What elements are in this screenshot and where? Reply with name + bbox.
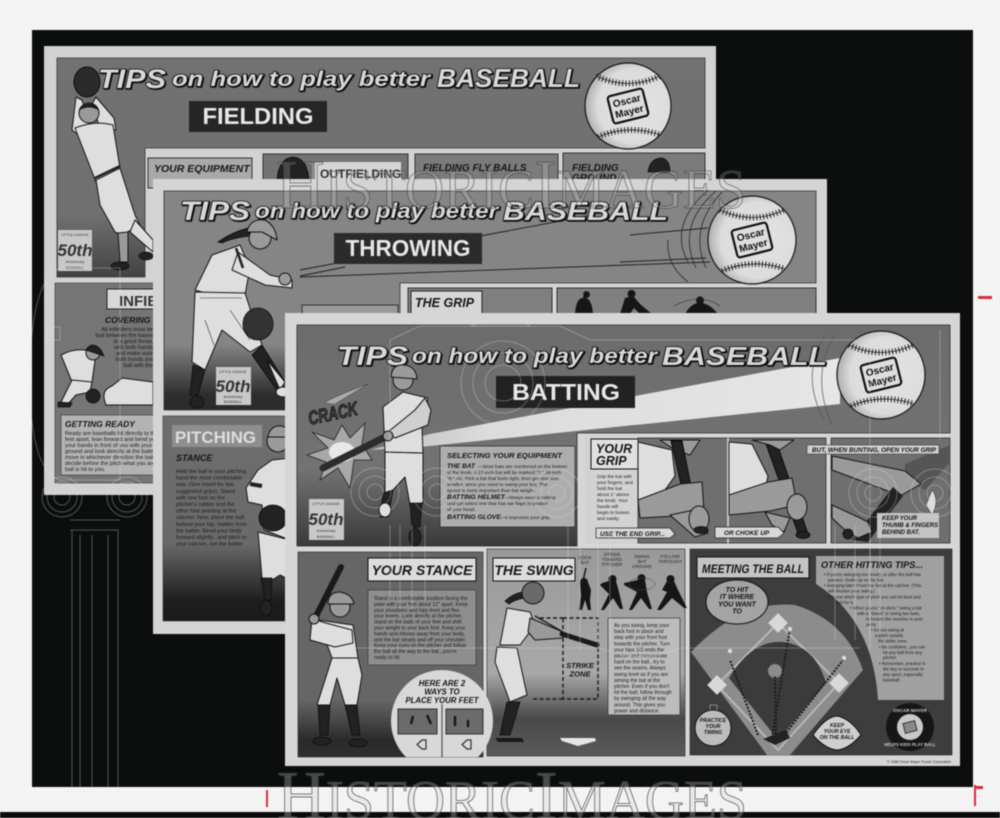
watermark: historic images top: HISTORICIMAGES xyxy=(276,147,746,224)
badge: oscar mayer helps kids play ball: HELPS KIDS PLAY BALL xyxy=(884,742,936,747)
text: crack: CRACK xyxy=(306,399,361,430)
text: pitching stance: catcher. Now, place the ball xyxy=(176,515,244,521)
text: swing: hit the ball, follow through xyxy=(614,690,672,696)
drawing: end grip xyxy=(638,440,709,537)
text: swing xyxy=(608,618,680,715)
title: batting sheet: on how to play better xyxy=(412,345,659,368)
text: swing: pitcher and concentrate xyxy=(614,654,667,660)
strike zone: ZONE xyxy=(568,670,591,678)
panel: outfielding xyxy=(258,149,411,184)
text: other hitting tips: the key to success in xyxy=(883,667,924,672)
text: pitching stance: hand the most comfortable xyxy=(176,476,242,482)
drawing: bunting hands xyxy=(832,445,950,542)
box: your equipment xyxy=(148,158,252,188)
heading: fielding: FIELDING xyxy=(202,103,314,129)
text: other hitting tips xyxy=(816,556,944,700)
text: pitching stance: behind your hip, hidden from xyxy=(176,522,247,528)
text: other hitting tips: baseball. xyxy=(883,677,901,682)
label: your stance xyxy=(368,558,476,581)
title: throwing sheet xyxy=(180,196,668,226)
text: other hitting tips: • Remember, practice is xyxy=(879,661,926,666)
text: getting ready: your hands in front of you with your glove xyxy=(65,443,167,449)
icon: keep your eye on the ball xyxy=(813,716,861,750)
callout: to hit it where you want to: TO HIT xyxy=(726,587,749,594)
icon: practice your timing stopwatch: TIMING xyxy=(704,730,722,736)
text: swing: step with your front foot xyxy=(614,635,668,641)
text: swing: your hips 1/3 ends the xyxy=(614,647,664,653)
text: other hitting tips: wait for it. xyxy=(835,600,854,605)
box: throwing equipment outline xyxy=(302,305,398,315)
text: getting ready: move in whichever direction the ball is xyxy=(65,455,159,461)
badge: 50th anniversary: BASEBALL xyxy=(224,400,242,404)
title: batting sheet: TIPS xyxy=(337,341,408,371)
heading: fielding xyxy=(189,101,327,132)
text: stance: your weight to your back foot. Keep your xyxy=(374,626,465,632)
icon: keep your eye on the ball: KEEP xyxy=(830,723,845,729)
text: swing: by swinging all the way xyxy=(614,696,667,702)
text: covering: is a good throw, xyxy=(114,339,153,345)
text: swing: around. This gives you xyxy=(614,702,665,708)
text: covering: both hands are xyxy=(116,357,153,363)
text: stance: Keep your eyes on the pitcher and follow xyxy=(374,643,466,649)
label: your grip: YOUR xyxy=(596,442,632,456)
callout: two ways to place your feet: WAYS TO xyxy=(424,688,460,696)
heading: batting: BATTING xyxy=(512,379,620,405)
text: stance: your shoulders and hips level and flex xyxy=(374,608,460,614)
heading: batting xyxy=(496,376,635,408)
icon: practice your timing stopwatch: PRACTICE xyxy=(700,718,727,724)
icon: home plate xyxy=(560,738,596,746)
text: pitching stance: suggested grips). Stand xyxy=(176,489,235,495)
text: other hitting tips: hit any ball from any xyxy=(883,650,923,655)
label: or choke up: OR CHOKE UP xyxy=(724,530,770,537)
diagram: baseball field xyxy=(691,605,863,755)
text: getting ready xyxy=(61,415,167,475)
callout: two ways to place your feet: HERE ARE 2 xyxy=(419,679,466,688)
swing stage labels: SWING xyxy=(634,554,650,559)
badge: 50th anniversary: Anniversary xyxy=(317,529,336,533)
swing stage labels: AROUND xyxy=(632,564,653,569)
text: copyright: © 1988 Oscar Mayer Foods Corporation xyxy=(887,760,951,764)
text: stance: your knees. Look directly at the pitcher, xyxy=(374,614,462,620)
panel: the grip: THE GRIP xyxy=(415,296,475,310)
label: use the end grip: USE THE END GRIP... xyxy=(600,531,665,538)
text: getting ready: ground and look directly at the batter. xyxy=(65,449,157,455)
speed rings xyxy=(812,335,835,425)
text: stance: stand on the balls of your feet and shift xyxy=(374,620,462,626)
text: other hitting tips: any sport, especially xyxy=(883,672,924,677)
badge: 50th anniversary xyxy=(58,230,92,271)
label: your stance: YOUR STANCE xyxy=(372,562,473,578)
text: other hitting tips: to loosen the muscles in your xyxy=(866,616,923,621)
text: pitching stance: other foot pointing at the xyxy=(176,509,236,515)
text: pitching stance: pitcher's rubber and the xyxy=(176,502,235,508)
label: meeting the ball xyxy=(697,557,809,578)
callout: to hit it where you want to: IT WHERE xyxy=(720,594,754,601)
label: but when bunting: BUT, WHEN BUNTING, OPEN YOUR GRIP xyxy=(812,448,937,454)
title: throwing sheet: BASEBALL xyxy=(503,196,668,226)
panel: fielding header xyxy=(57,58,705,277)
text: selecting your equipment xyxy=(440,446,575,527)
text: stance: ready to hit. xyxy=(374,655,401,661)
text: pitching stance: with one foot on the xyxy=(175,495,225,501)
icon: oscar mayer baseball: Oscar xyxy=(865,362,895,379)
swing stage labels xyxy=(578,552,682,569)
text: other hitting tips: a pitch outside xyxy=(875,633,904,638)
text: getting ready: GETTING READY xyxy=(65,419,136,429)
swing stage labels: PITCHER xyxy=(602,562,623,567)
text: getting ready: feet apart, lean forward and bend your xyxy=(65,437,160,443)
icon: oscar mayer baseball: Mayer xyxy=(614,103,645,121)
label: the swing: THE SWING xyxy=(494,562,574,578)
text: other hitting tips: • Swinging late? Front the bat at the catcher. (This xyxy=(824,583,922,588)
label: use the end grip xyxy=(596,528,675,538)
badge: 50th anniversary: BASEBALL xyxy=(66,266,84,270)
panel: your grip xyxy=(585,434,826,544)
swing stage labels: COCK xyxy=(578,555,593,560)
crop marks xyxy=(266,296,992,807)
callout: to hit it where you want to: TO xyxy=(732,609,742,616)
label: but when bunting xyxy=(807,445,939,454)
title: fielding sheet: TIPS xyxy=(98,64,166,94)
panel: outfielding: OUTFIELDING xyxy=(320,167,401,181)
text: swing: power and distance. xyxy=(614,708,660,714)
text: selecting your equipment: smaller, since you need to swing your bat. The xyxy=(447,482,548,488)
label: or choke up xyxy=(715,527,784,538)
text: other hitting tips: the strike zone. xyxy=(878,638,908,643)
text: swing: swing level as if you are xyxy=(614,672,668,678)
speed lines xyxy=(300,190,722,282)
text: swing: hard on the ball...try to xyxy=(614,660,665,666)
text: other hitting tips: passed, choke up on the bat. xyxy=(828,577,884,582)
icon: keep your eye on the ball: YOUR EYE xyxy=(824,729,851,735)
text: swing: aiming the bat at the xyxy=(614,678,660,684)
badge: 50th anniversary: 50th xyxy=(309,510,343,529)
text: other hitting tips: with a "donut" or swing two bats, xyxy=(857,611,920,616)
badge: 50th anniversary: LITTLE LEAGUE xyxy=(312,502,340,506)
text: getting ready: decide before the pitch what you are xyxy=(65,461,155,467)
text: swing: towards the pitcher. Turn xyxy=(614,641,670,647)
text: other hitting tips: will shorten your swing.) xyxy=(828,589,875,594)
text: selecting your equipment: "8," etc. Pick a bat that feels right, then get one size xyxy=(447,476,559,482)
drawing: choke up xyxy=(729,440,810,538)
panel: fielding fly balls xyxy=(415,154,558,184)
text: stance: plate with your feet about 12" apart. Keep xyxy=(374,602,468,608)
badge: 50th anniversary xyxy=(216,367,251,405)
label: pitching: PITCHING xyxy=(175,429,256,447)
text: other hitting tips: • Know which type of pitch you can hit best and xyxy=(829,594,921,599)
text: selecting your equipment: —Always wear a batting xyxy=(503,495,556,501)
figure: infielder and slider xyxy=(58,345,153,407)
text: pitching stance: way. (See insert for two xyxy=(175,482,234,488)
icon: oscar mayer baseball xyxy=(837,331,925,419)
icon: oscar mayer baseball: Oscar xyxy=(736,227,766,244)
callout: two ways to place your feet: PLACE YOUR FEET xyxy=(405,696,480,705)
figure: batter swinging xyxy=(495,582,597,742)
panel: grip photos xyxy=(638,438,826,543)
text: swing: pitcher. Even if you don't xyxy=(614,684,670,690)
sheet: throwing xyxy=(153,179,827,634)
badge: 50th anniversary: 50th xyxy=(58,241,92,260)
text: selecting your equipment: BATTING HELMET xyxy=(447,494,506,501)
text: selecting your equipment: —It improves your grip. xyxy=(500,515,551,521)
text: grip: your fingers, and xyxy=(597,480,633,486)
icon: oscar mayer baseball: Mayer xyxy=(867,372,898,390)
icon: oscar mayer baseball: Mayer xyxy=(738,237,769,255)
text: selecting your equipment: —Most bats are numbered on the bottom xyxy=(478,464,567,470)
text: covering: and make sure xyxy=(116,351,153,357)
text: other hitting tips: • Be confident...you can xyxy=(879,644,926,649)
text: swing: see the seams. Always xyxy=(614,666,666,672)
badge: oscar mayer helps kids play ball xyxy=(884,703,936,751)
panel: your stance xyxy=(298,552,483,757)
figure: fielder catching xyxy=(72,67,153,270)
text: grip: about 1" above xyxy=(597,492,629,498)
label: meeting the ball: MEETING THE BALL xyxy=(702,564,804,576)
icon: keep your eye on the ball: ON THE BALL xyxy=(820,735,854,741)
figure: thrower xyxy=(190,220,292,408)
sheet: fielding xyxy=(44,46,716,495)
badge: 50th anniversary: Anniversary xyxy=(66,260,85,264)
panel: fielding fly balls: FIELDING FLY BALLS xyxy=(423,163,527,174)
text: other hitting tips: • If you're swinging too slowly, or after the ball has xyxy=(824,572,922,577)
text: selecting your equipment: of the knob. A 27-inch bat will be marked "7," 28-inch xyxy=(447,470,561,476)
text: stance xyxy=(368,590,476,665)
text: getting ready: Ready are baseballs hit directly to the xyxy=(65,431,158,437)
text: selecting your equipment: and get select one that has ear flaps to protect xyxy=(447,501,548,507)
icon: oscar mayer baseball xyxy=(585,63,671,149)
icon: oscar mayer baseball: Oscar xyxy=(612,93,642,110)
sheet: batting xyxy=(285,313,960,772)
swing stage labels: STRIDE xyxy=(604,552,620,557)
label: your grip: GRIP xyxy=(596,454,627,468)
box: your equipment: YOUR EQUIPMENT xyxy=(154,163,251,175)
figure: pitcher xyxy=(245,424,286,603)
text: other hitting tips: • Do not swing at xyxy=(871,628,905,633)
swing stage labels: BAT xyxy=(638,559,646,564)
text: other hitting tips: pitcher. xyxy=(883,655,897,660)
label: keep your thumb xyxy=(877,513,939,538)
callout: to hit it where you want to xyxy=(706,580,768,624)
swing stage labels: BAT xyxy=(581,560,589,565)
text: grip: the knob. Your xyxy=(597,498,628,504)
text: grip: begin to loosen xyxy=(597,510,630,516)
text: covering: COVERING xyxy=(105,315,151,325)
text: grip: hold the bat xyxy=(597,486,623,492)
text: selecting your equipment: of your head. xyxy=(447,507,476,513)
icon: swing stage silhouettes xyxy=(579,568,687,610)
panel: throwing motion silhouettes xyxy=(557,288,816,314)
callout: to hit it where you want to: YOU WANT xyxy=(718,601,757,608)
swing stage labels: FOLLOW xyxy=(660,554,680,559)
badge: 50th anniversary: LITTLE LEAGUE xyxy=(219,370,247,374)
badge: 50th anniversary xyxy=(309,499,344,540)
label: the swing xyxy=(493,558,575,581)
text: pitching stance: Hold the ball in your pitching xyxy=(176,469,246,475)
text: stance: and the bat steady and off your shoulder. xyxy=(374,637,466,643)
title: fielding sheet: on how to play better xyxy=(172,68,432,91)
strike zone: STRIKE xyxy=(566,661,595,670)
badge: 50th anniversary: Anniversary xyxy=(224,395,243,399)
panel: infielding xyxy=(55,283,167,483)
panel: throwing header xyxy=(164,191,816,410)
panel: the swing xyxy=(487,549,687,756)
strike zone xyxy=(533,618,598,699)
panel: bunting grip xyxy=(807,438,950,543)
text: swing: back foot in place and xyxy=(614,629,664,635)
icon: oscar mayer baseball xyxy=(708,196,796,284)
icon: practice your timing stopwatch xyxy=(695,705,731,746)
text: covering: ball with the xyxy=(123,363,153,369)
figure: batter stance xyxy=(309,567,367,747)
title: throwing sheet: on how to play better xyxy=(255,200,500,223)
text: stance: hands and elbows away from your body, xyxy=(374,631,465,637)
swoosh arc xyxy=(325,384,368,404)
figure: batter follow through xyxy=(323,365,431,546)
label: keep your thumb: KEEP YOUR xyxy=(882,516,918,522)
text: grip: hands will xyxy=(597,504,618,510)
label: infielding xyxy=(107,289,157,310)
panel: pitching xyxy=(163,416,290,621)
panel: the grip xyxy=(403,284,552,314)
label: keep your thumb: THUMB & FINGERS xyxy=(882,523,938,529)
burst: bat hits ball xyxy=(307,423,372,488)
text: pitching stance: forward slightly...and pitch to xyxy=(176,535,246,541)
text: covering: fast between the bases xyxy=(95,333,153,339)
text: swing: As you swing, keep your xyxy=(614,623,670,629)
panel: fielding ground balls: GROUND xyxy=(572,173,616,184)
title: fielding sheet xyxy=(98,63,580,94)
heading: stance: STANCE xyxy=(176,453,213,463)
text: pitching stance: the batter. Bend your body xyxy=(176,528,242,534)
title: fielding sheet: BASEBALL xyxy=(437,63,580,93)
swing stage labels: TOWARD xyxy=(602,557,623,562)
text: selecting your equipment: SELECTING YOUR EQUIPMENT xyxy=(447,451,563,460)
text: other hitting tips: arms. xyxy=(866,622,877,627)
badge: oscar mayer helps kids play ball: OSCAR MAYER xyxy=(893,708,928,713)
title: batting sheet xyxy=(337,341,827,371)
text: covering: All infielders must be xyxy=(101,327,153,333)
text: selecting your equipment: speed is more important than bat weight. xyxy=(447,488,535,494)
label: infielding: INFIE xyxy=(119,293,157,310)
icon: practice your timing stopwatch: YOUR xyxy=(706,724,721,730)
beam of light xyxy=(370,358,840,450)
panel: batting header xyxy=(297,325,950,546)
text: selecting your equipment: BATTING GLOVE xyxy=(447,514,501,521)
panel: fielding ground balls: FIELDING xyxy=(572,163,619,174)
text: pitching stance: your catcher, not the batter. xyxy=(176,542,244,548)
badge: 50th anniversary: BASEBALL xyxy=(317,535,335,539)
label: your grip xyxy=(591,439,638,469)
text: covering xyxy=(95,315,153,369)
heading: throwing: THROWING xyxy=(346,235,470,261)
panel: fielding ground balls xyxy=(563,153,705,184)
title: throwing sheet: TIPS xyxy=(180,196,250,226)
text: other hitting tips: OTHER HITTING TIPS... xyxy=(821,560,923,571)
label: keep your thumb: BEHIND BAT. xyxy=(882,530,920,536)
text: grip: and easily. xyxy=(597,516,620,522)
text: other hitting tips: • When you're "on deck," swing a bat xyxy=(850,606,922,611)
text: getting ready: ball is hit to you. xyxy=(65,467,106,473)
swing stage labels: THROUGH xyxy=(658,559,682,564)
text: stance: Stand in a comfortable position facing the xyxy=(374,596,468,602)
callout: two ways to place your feet xyxy=(390,669,494,758)
badge: 50th anniversary: LITTLE LEAGUE xyxy=(61,233,89,237)
badge: 50th anniversary: 50th xyxy=(216,377,250,396)
text: grip: Grip the bat with xyxy=(597,474,632,480)
title: batting sheet: BASEBALL xyxy=(662,341,827,371)
watermark: camera and columns xyxy=(30,268,959,790)
panel: meeting the ball xyxy=(690,549,952,755)
text: selecting your equipment: THE BAT xyxy=(447,463,476,470)
text: stance: the ball all the way to the bat...you're xyxy=(374,649,457,655)
text: covering: with both hands xyxy=(113,345,153,351)
